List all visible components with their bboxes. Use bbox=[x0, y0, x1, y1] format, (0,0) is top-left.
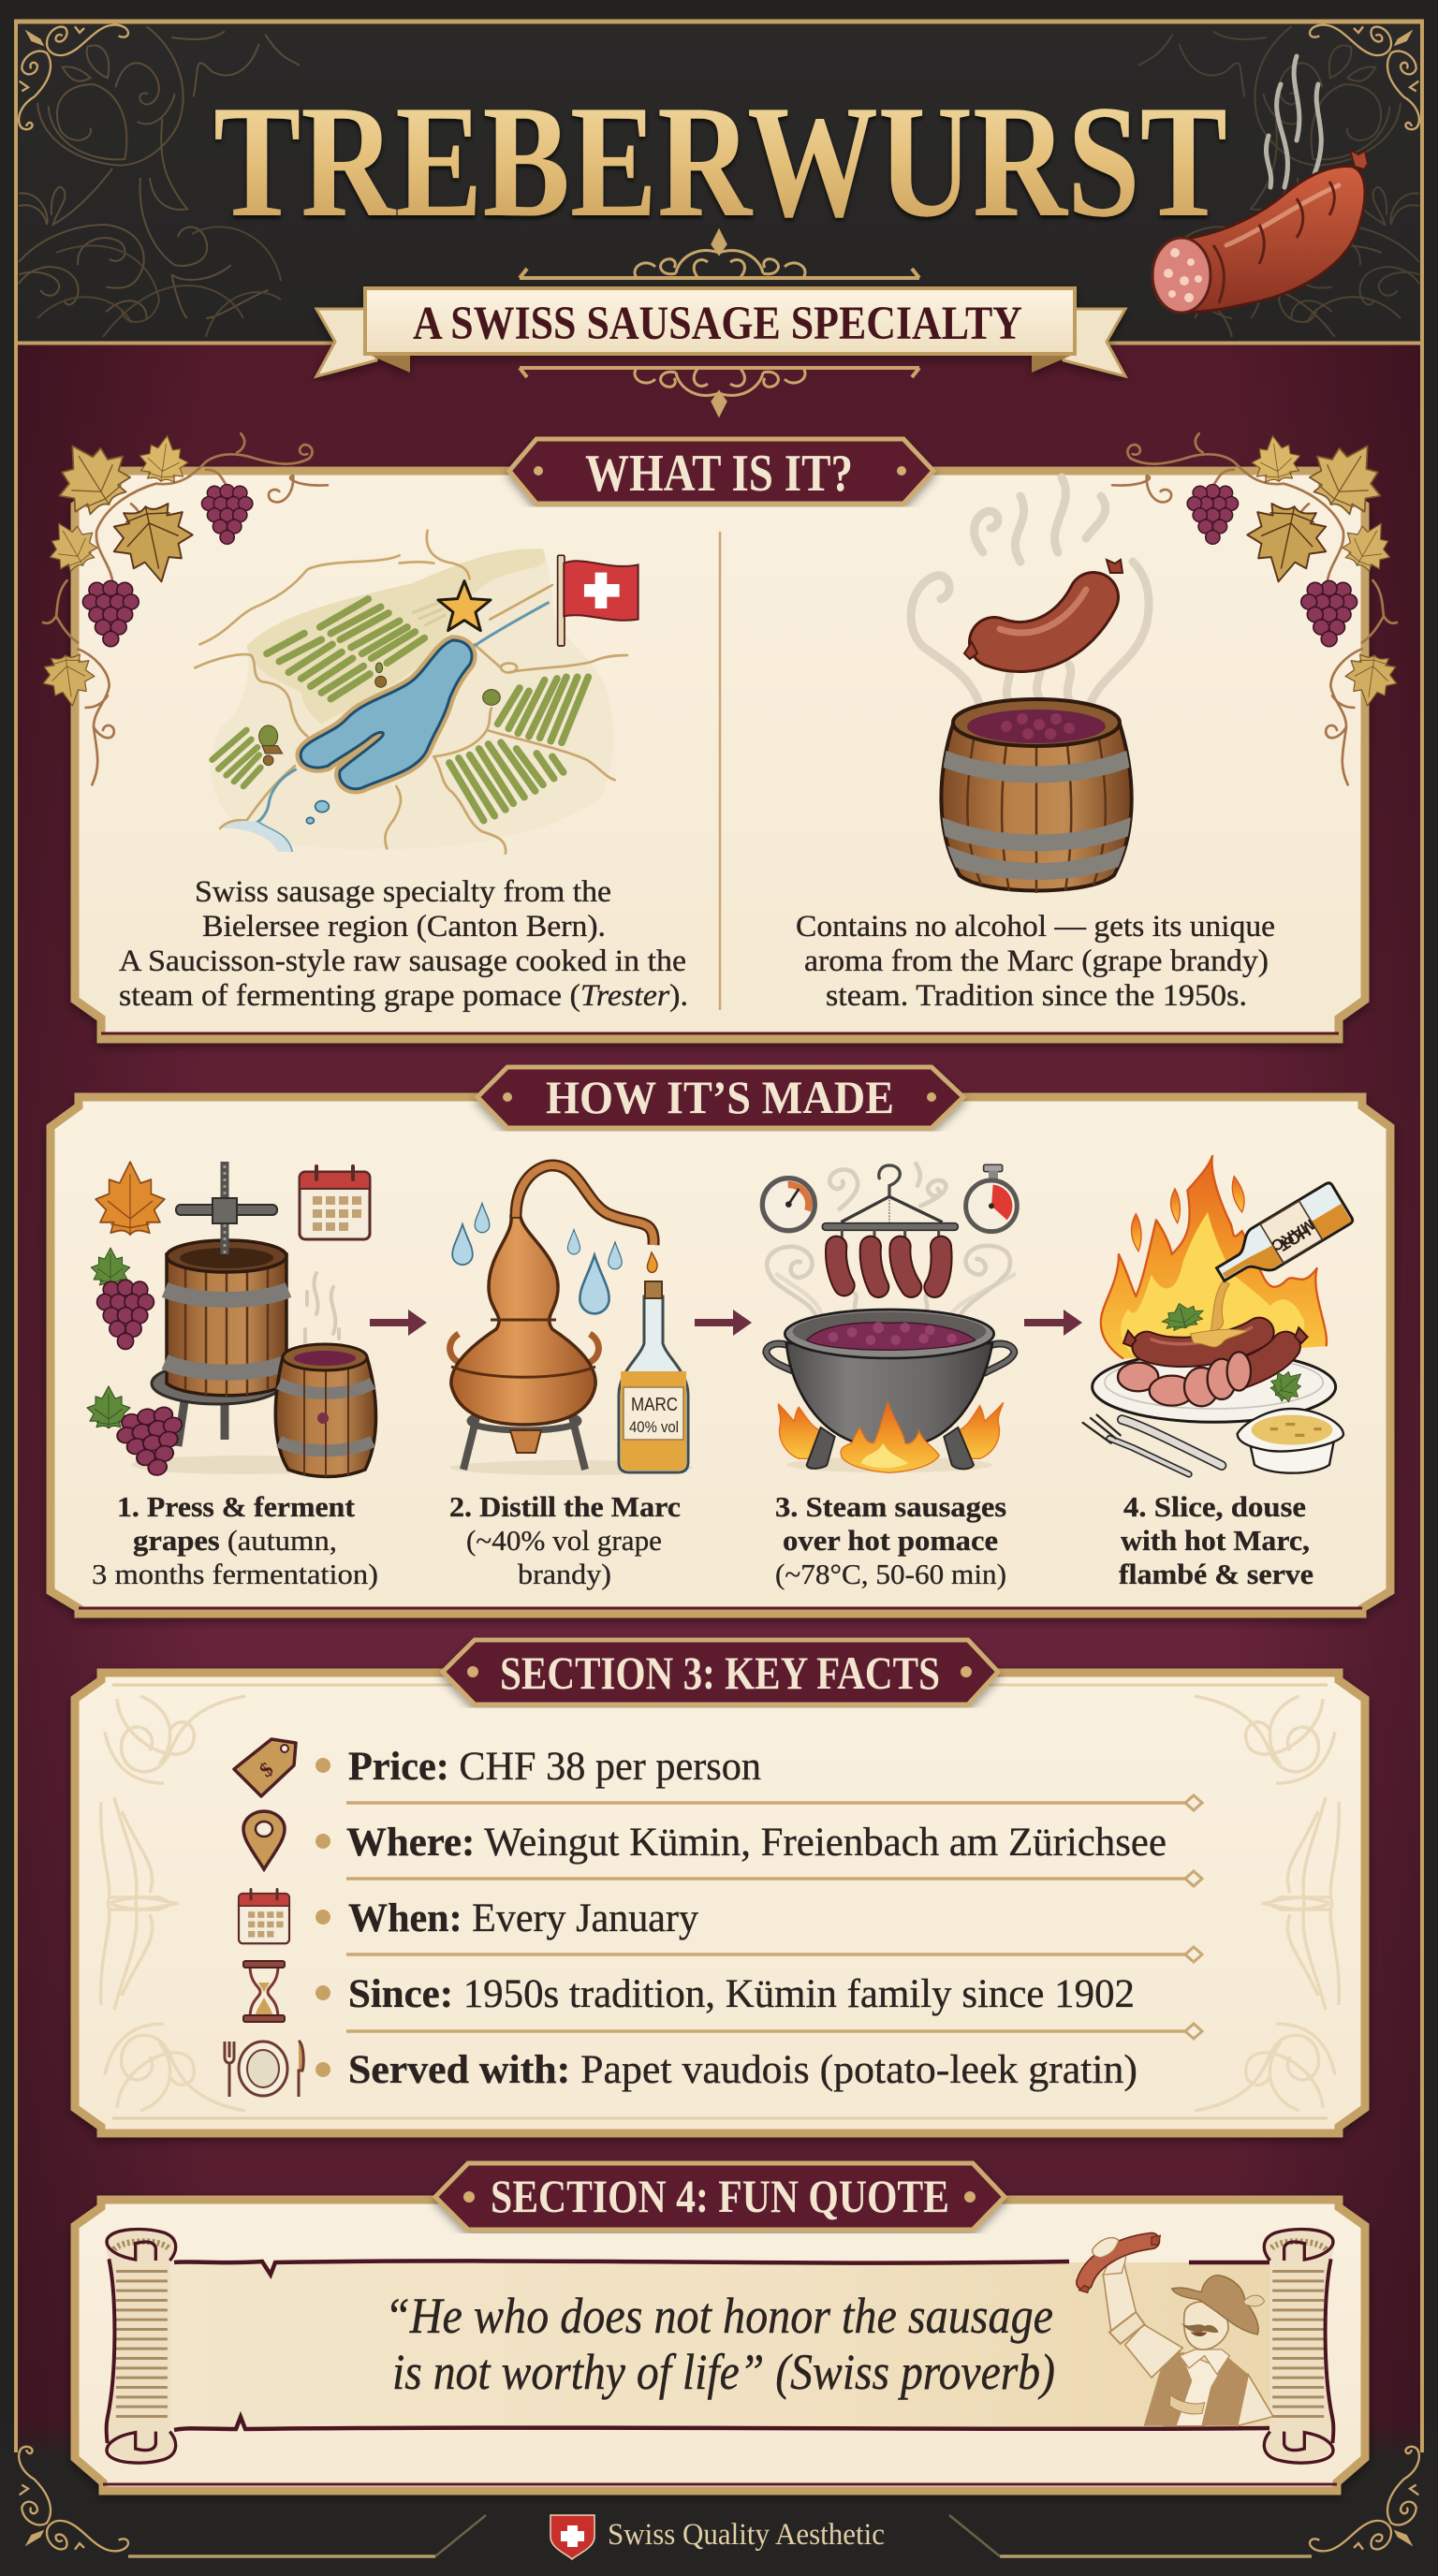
illustration: cheerful man raising sausage bbox=[1079, 2235, 1273, 2426]
icon: price tag: $ bbox=[255, 1757, 278, 1781]
bottle with HOT MARC label: HOT bbox=[1275, 1222, 1314, 1255]
step 4 caption: flambé & serve bbox=[1119, 1558, 1313, 1590]
heading plaque: fun quote: SECTION 4: FUN QUOTE bbox=[491, 2170, 949, 2222]
bottle: 40% vol bbox=[629, 1418, 679, 1436]
panel: what is it bbox=[37, 426, 1402, 1039]
step 4 caption bbox=[1119, 1490, 1313, 1590]
step 1 caption: 1. Press & ferment bbox=[117, 1490, 356, 1523]
text: what is it right: aroma from the Marc (grape brandy) bbox=[804, 944, 1269, 978]
quote text bbox=[385, 2288, 1055, 2400]
footer text: Swiss Quality Aesthetic bbox=[608, 2518, 885, 2552]
heading plaque: what is it: WHAT IS IT? bbox=[585, 445, 853, 503]
icon: swiss shield bbox=[550, 2515, 594, 2559]
illustration: step 4 flambé bbox=[1083, 1156, 1354, 1474]
hanger with sausages bbox=[822, 1165, 958, 1287]
gauge bbox=[762, 1178, 814, 1231]
panel: fun quote bbox=[75, 2163, 1365, 2491]
fact: when: When: Every January bbox=[348, 1896, 698, 1940]
text: what is it right: steam. Tradition since the 1950s. bbox=[826, 979, 1247, 1013]
fact: since: Since: 1950s tradition, Kümin family since 1902 bbox=[348, 1972, 1135, 2016]
subtitle text: A SWISS SAUSAGE SPECIALTY bbox=[413, 298, 1022, 350]
quote text: “He who does not honor the sausage bbox=[385, 2288, 1053, 2344]
step 2 caption: (~40% vol grape bbox=[466, 1524, 662, 1557]
sausages and slices bbox=[1118, 1327, 1308, 1406]
title: TREBERWURST bbox=[213, 73, 1227, 251]
icon: price tag bbox=[234, 1739, 296, 1796]
step 1 caption: 3 months fermentation) bbox=[92, 1558, 378, 1590]
fork and knife bbox=[1083, 1415, 1222, 1474]
bottle bbox=[619, 1281, 688, 1472]
icon: location pin bbox=[243, 1811, 285, 1869]
fact: where: Where: Weingut Kümin, Freienbach am Zürichsee bbox=[346, 1821, 1167, 1865]
text: what is it right bbox=[796, 910, 1275, 1013]
step 3 caption: (~78°C, 50-60 min) bbox=[775, 1558, 1006, 1590]
arrow 1 bbox=[370, 1310, 427, 1336]
step 3 caption: 3. Steam sausages bbox=[775, 1490, 1006, 1523]
icon: calendar bbox=[239, 1890, 289, 1943]
step 2 caption: brandy) bbox=[518, 1558, 611, 1590]
step 3 caption: over hot pomace bbox=[783, 1524, 998, 1557]
footer line bbox=[128, 2515, 1312, 2556]
subtitle ribbon bbox=[316, 288, 1125, 376]
scroll bbox=[106, 2230, 1334, 2463]
embossed corner scrolls bbox=[101, 1696, 1339, 2111]
stopwatch bbox=[966, 1164, 1017, 1232]
step 1 caption bbox=[92, 1490, 378, 1590]
row separators bbox=[346, 1795, 1202, 2039]
header background bbox=[14, 21, 1423, 344]
text: what is it left bbox=[119, 875, 688, 1013]
heading plaque: key facts: SECTION 3: KEY FACTS bbox=[500, 1647, 940, 1699]
heading plaque: key facts bbox=[443, 1640, 998, 1705]
step 4 caption: 4. Slice, douse bbox=[1123, 1490, 1306, 1523]
text: what is it left: steam of fermenting grape pomace ( Trester). bbox=[119, 979, 688, 1013]
sausage bbox=[994, 590, 1093, 647]
icon: steaming sausage bbox=[1152, 56, 1368, 313]
text: what is it right: Contains no alcohol — gets its unique bbox=[796, 910, 1275, 944]
icon: plate and cutlery bbox=[225, 2041, 303, 2097]
illustration: step 3 cauldron bbox=[762, 1164, 1017, 1472]
text: what is it left: Bielersee region (Canton Bern). bbox=[202, 910, 606, 944]
bottle with HOT MARC label: MARC bbox=[1269, 1215, 1317, 1254]
step 3 caption bbox=[775, 1490, 1006, 1590]
step 1 caption: grapes (autumn, bbox=[133, 1524, 337, 1557]
bullets bbox=[315, 1758, 330, 2077]
star location marker bbox=[438, 581, 491, 631]
heading plaque: how it's made bbox=[477, 1067, 963, 1128]
panel: key facts bbox=[75, 1640, 1365, 2133]
icon: hourglass bbox=[243, 1961, 285, 2022]
vine decorations bbox=[37, 426, 1402, 784]
illustration: barrel with sausage in steam bbox=[911, 477, 1149, 893]
text: what is it left: A Saucisson-style raw sausage cooked in the bbox=[119, 944, 686, 978]
step 2 caption: 2. Distill the Marc bbox=[449, 1490, 681, 1523]
step 4 caption: with hot Marc, bbox=[1121, 1524, 1310, 1557]
heading plaque: what is it bbox=[509, 439, 933, 504]
arrow 3 bbox=[1024, 1310, 1082, 1336]
text: what is it left: Swiss sausage specialty from the bbox=[195, 875, 611, 909]
bottle with HOT MARC label bbox=[1209, 1181, 1354, 1295]
illustration: step 1 press bbox=[87, 1162, 376, 1482]
gratin dish bbox=[1238, 1409, 1343, 1473]
heading plaque: fun quote bbox=[435, 2163, 1005, 2230]
fact: served with: Served with: Papet vaudois (potato-leek gratin) bbox=[348, 2048, 1137, 2092]
quote text: is not worthy of life” (Swiss proverb) bbox=[392, 2344, 1055, 2400]
heading plaque: how it's made: HOW IT’S MADE bbox=[546, 1071, 894, 1123]
illustration: step 2 copper still bbox=[449, 1165, 693, 1475]
bottle: MARC bbox=[631, 1395, 678, 1415]
step 2 caption bbox=[449, 1490, 681, 1590]
swiss flag bbox=[558, 555, 638, 646]
panel: how it's made bbox=[51, 1067, 1390, 1614]
map of Bielersee region bbox=[195, 531, 638, 854]
subtitle ornaments bbox=[520, 231, 919, 415]
fact: price: Price: CHF 38 per person bbox=[348, 1745, 761, 1789]
arrow 2 bbox=[695, 1310, 752, 1336]
